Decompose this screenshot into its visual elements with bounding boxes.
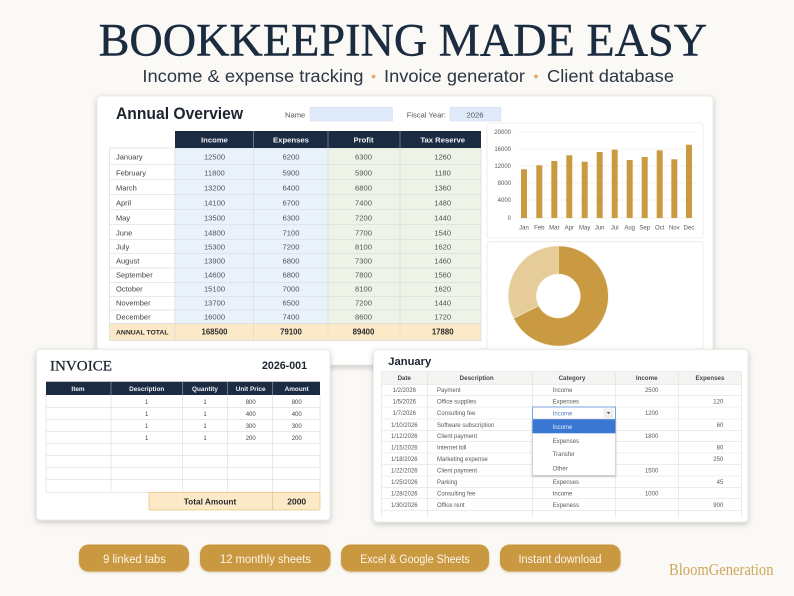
invoice rows: 1 — [145, 424, 149, 430]
fiscal year field: 2026 — [467, 110, 483, 120]
month rows: 6800 — [283, 271, 299, 280]
total amount row: 2000 — [287, 496, 306, 506]
annual total row: 89400 — [353, 328, 375, 337]
month rows: 8600 — [355, 313, 372, 322]
bar chart: Jul — [611, 226, 619, 232]
month rows: 1440 — [434, 299, 451, 308]
month rows: November — [116, 299, 151, 308]
january table header — [398, 375, 725, 382]
invoice rows — [145, 400, 302, 442]
ledger rows: 1/25/2026 — [391, 480, 418, 486]
feature pill: instant download: Instant download — [518, 552, 602, 566]
ledger rows: 1/5/2026 — [393, 399, 417, 405]
annual total row: 168500 — [201, 328, 228, 337]
ledger rows: Client payment — [437, 434, 477, 440]
bar chart: Nov — [669, 226, 680, 232]
month rows: 1180 — [435, 168, 451, 177]
invoice number: 2026-001 — [262, 360, 307, 372]
month rows: 5900 — [283, 168, 299, 177]
ledger rows: Expeness — [553, 503, 579, 509]
feature pill: 9 linked tabs: 9 linked tabs — [103, 552, 166, 566]
donut chart — [487, 242, 703, 357]
month rows: December — [116, 313, 151, 322]
ledger rows: 1500 — [645, 468, 659, 474]
bar chart: Dec — [684, 226, 694, 232]
bar chart: Feb — [534, 226, 545, 232]
invoice rows: 200 — [292, 436, 302, 442]
bar chart — [487, 123, 703, 238]
fiscal year field: Fiscal Year: — [407, 110, 446, 120]
subtitle features: Income & expense tracking — [142, 66, 363, 86]
ledger rows — [391, 388, 724, 509]
annual total row: ANNUAL TOTAL — [116, 329, 168, 336]
ledger rows: 900 — [713, 503, 724, 509]
annual table — [110, 131, 481, 341]
invoice table header: Quantity — [192, 386, 218, 393]
ledger rows: 1/15/2026 — [391, 445, 418, 451]
bar chart: Jun — [595, 226, 605, 232]
january table — [382, 372, 742, 518]
month rows: July — [116, 243, 130, 252]
month rows: 6300 — [283, 213, 299, 222]
invoice rows: 200 — [246, 436, 256, 442]
invoice rows: 300 — [246, 424, 256, 430]
month rows: 1540 — [434, 228, 451, 237]
ledger rows: 1200 — [645, 411, 659, 417]
month rows: 6700 — [283, 198, 299, 207]
brand wordmark: BloomGeneration — [669, 560, 774, 579]
invoice rows: 1 — [145, 436, 149, 442]
month rows: 14100 — [204, 198, 225, 207]
subtitle features: Client database — [547, 66, 674, 86]
bar chart: 4000 — [498, 198, 512, 204]
category dropdown: Transfer — [553, 452, 575, 458]
bar chart: Sep — [639, 226, 651, 232]
ledger rows: Software subscription — [437, 423, 494, 429]
january table header: Income — [636, 375, 658, 382]
invoice table — [46, 382, 320, 510]
month rows: 1480 — [434, 198, 451, 207]
total amount row — [149, 492, 320, 510]
month rows: 1260 — [434, 153, 451, 162]
invoice heading: INVOICE — [50, 359, 112, 375]
bar chart: 20000 — [494, 130, 512, 136]
ledger rows: 1/10/2026 — [391, 423, 418, 429]
month rows: 12500 — [204, 153, 225, 162]
january table header: Description — [460, 375, 494, 382]
fiscal year field — [407, 107, 501, 121]
month rows: 7800 — [355, 271, 372, 280]
invoice rows: 400 — [292, 412, 302, 418]
category dropdown: Expenses — [553, 439, 579, 445]
month rows: March — [116, 183, 137, 192]
invoice rows: 800 — [292, 400, 302, 406]
category dropdown — [532, 407, 616, 475]
bar chart: May — [579, 226, 590, 232]
invoice table header: Unit Price — [236, 386, 266, 393]
feature pill: 12 monthly sheets: 12 monthly sheets — [220, 552, 311, 566]
table header: Tax Reserve — [420, 136, 466, 144]
month rows: 7200 — [283, 243, 299, 252]
panel: january ledger — [374, 350, 748, 522]
month rows: June — [116, 228, 132, 237]
month rows: 13500 — [204, 213, 225, 222]
ledger rows: Income — [553, 491, 573, 497]
subtitle features — [142, 66, 674, 86]
invoice table header: Amount — [285, 386, 310, 393]
month rows: 13700 — [204, 299, 225, 308]
table header: Expenses — [273, 136, 309, 144]
month rows: 6300 — [355, 153, 372, 162]
bar chart: 12000 — [494, 164, 512, 170]
month rows: 1620 — [434, 243, 451, 252]
month rows: 6400 — [283, 183, 299, 192]
invoice rows: 1 — [203, 412, 207, 418]
ledger rows: 250 — [713, 457, 724, 463]
ledger rows: Internet bill — [437, 445, 466, 451]
ledger rows: 1000 — [645, 491, 659, 497]
feature pill: excel and google sheets: Excel & Google Sheets — [360, 552, 470, 566]
invoice table header: Description — [129, 386, 164, 393]
total amount row: Total Amount — [184, 496, 236, 506]
ledger rows: Expenses — [553, 399, 579, 405]
month rows: 7200 — [355, 213, 372, 222]
month rows: 13200 — [204, 183, 225, 192]
month rows: 14600 — [204, 271, 225, 280]
ledger rows: 60 — [717, 423, 724, 429]
month rows: October — [116, 285, 143, 294]
month rows: September — [116, 271, 153, 280]
invoice rows: 1 — [203, 436, 207, 442]
title: BOOKKEEPING MADE EASY — [99, 16, 707, 67]
table header: Profit — [353, 136, 374, 144]
ledger rows: Parking — [437, 480, 457, 486]
annual total row — [116, 328, 454, 337]
invoice rows: 300 — [292, 424, 302, 430]
bar chart: 0 — [508, 216, 512, 222]
annual total row: 17880 — [432, 328, 454, 337]
month rows: 1460 — [434, 257, 451, 266]
month rows: 6500 — [283, 299, 299, 308]
bar chart: 16000 — [494, 147, 512, 153]
ledger rows: 1/7/2026 — [393, 411, 417, 417]
month rows: 8100 — [355, 285, 372, 294]
feature pill: instant download — [500, 544, 620, 572]
invoice rows: 1 — [145, 412, 149, 418]
ledger rows: Office supplies — [437, 399, 476, 405]
month rows: 6800 — [283, 257, 299, 266]
month rows — [116, 153, 451, 322]
feature pill: 12 monthly sheets — [200, 544, 330, 572]
invoice table header: Item — [71, 386, 85, 393]
ledger rows: Expenses — [553, 480, 579, 486]
month rows: 1360 — [434, 183, 451, 192]
january table header: Category — [559, 375, 586, 382]
feature pill: 9 linked tabs — [79, 544, 189, 572]
month rows: May — [116, 213, 130, 222]
month rows: 6200 — [283, 153, 299, 162]
panel: annual overview — [36, 96, 774, 579]
panel: invoice — [36, 350, 330, 520]
ledger rows: 1/2/2026 — [393, 388, 417, 394]
ledger rows: 1/22/2026 — [391, 468, 418, 474]
month rows: 1720 — [434, 313, 451, 322]
ledger rows: Consulting fee — [437, 491, 476, 497]
invoice rows: 800 — [246, 400, 256, 406]
ledger rows: 1/18/2026 — [391, 457, 418, 463]
bar chart: Oct — [655, 226, 665, 232]
ledger rows: Consulting fee — [437, 411, 476, 417]
month rows: 13900 — [204, 257, 225, 266]
month rows: 7100 — [283, 228, 299, 237]
ledger rows: Office rent — [437, 503, 465, 509]
ledger rows: 1/28/2026 — [391, 491, 418, 497]
invoice table header — [46, 382, 320, 395]
invoice rows: 1 — [203, 400, 207, 406]
month rows: April — [116, 198, 131, 207]
bar chart: Apr — [565, 226, 574, 232]
ledger rows: Client payment — [437, 468, 477, 474]
month rows: 7400 — [283, 313, 299, 322]
feature pill: excel and google sheets — [341, 544, 489, 572]
month rows: 1560 — [434, 271, 451, 280]
category dropdown: Other — [553, 466, 568, 472]
ledger rows: 1/30/2026 — [391, 503, 418, 509]
month rows: 15300 — [204, 243, 225, 252]
month rows: 1440 — [434, 213, 451, 222]
invoice rows: 400 — [246, 412, 256, 418]
bar chart: Jan — [519, 226, 529, 232]
heading: annual overview: Annual Overview — [116, 104, 244, 123]
month rows: 7000 — [283, 285, 299, 294]
ledger rows: Payment — [437, 388, 461, 394]
invoice rows: 1 — [145, 400, 149, 406]
month rows: 14800 — [204, 228, 225, 237]
month rows: 5900 — [355, 168, 372, 177]
table header — [175, 131, 481, 148]
ledger rows: 80 — [717, 445, 724, 451]
invoice rows: 1 — [203, 424, 207, 430]
january heading: January — [388, 356, 432, 368]
month rows: January — [116, 153, 143, 162]
month rows: February — [116, 168, 146, 177]
category dropdown: Income — [553, 411, 573, 417]
month rows: 16000 — [204, 313, 225, 322]
month rows: 7400 — [355, 198, 372, 207]
name field — [285, 107, 392, 121]
month rows: 7700 — [355, 228, 372, 237]
month rows: 8100 — [355, 243, 372, 252]
annual total row: 79100 — [280, 328, 303, 337]
january table header: Expenses — [696, 375, 725, 382]
ledger rows: 1800 — [645, 434, 659, 440]
january table header: Date — [398, 375, 412, 382]
month rows: 7300 — [355, 257, 372, 266]
subtitle features: Invoice generator — [384, 66, 525, 86]
ledger rows: 120 — [713, 399, 724, 405]
month rows: August — [116, 257, 140, 266]
ledger rows: 45 — [717, 480, 724, 486]
ledger rows: 1/12/2026 — [391, 434, 418, 440]
month rows: 15100 — [204, 285, 225, 294]
bar chart: 8000 — [498, 181, 512, 187]
table header: Income — [201, 136, 229, 144]
ledger rows: Income — [553, 388, 573, 394]
category dropdown: Income — [553, 425, 573, 431]
month rows: 7200 — [355, 299, 372, 308]
month rows: 6800 — [355, 183, 372, 192]
ledger rows: Marketing expense — [437, 457, 488, 463]
bar chart: Aug — [624, 226, 635, 232]
month rows: 1620 — [434, 285, 451, 294]
name field: Name — [285, 110, 305, 120]
ledger rows: 2500 — [645, 388, 659, 394]
bar chart: Mar — [549, 226, 559, 232]
month rows: 11800 — [204, 168, 225, 177]
